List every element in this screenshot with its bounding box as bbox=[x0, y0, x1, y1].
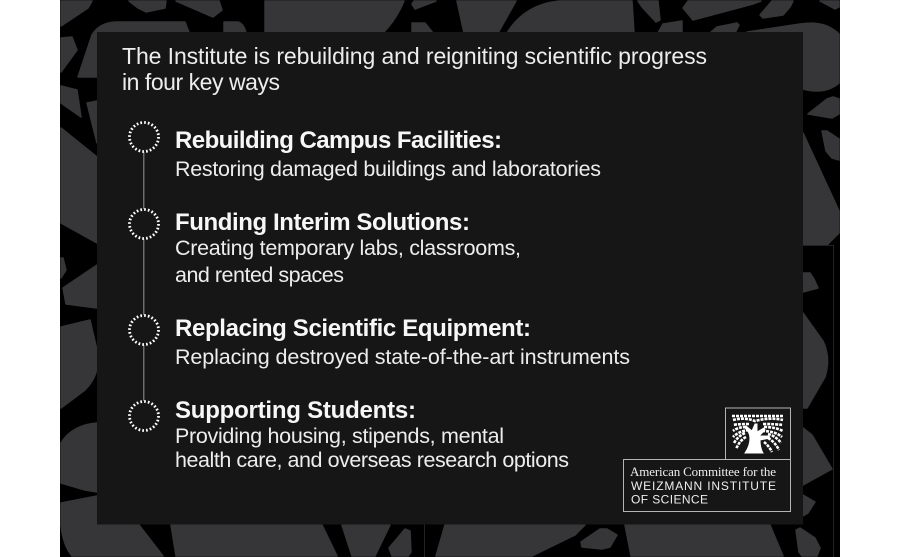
title: The Institute is rebuilding and reigniting scientific progress bbox=[122, 43, 707, 69]
icon: dotted ring 3 bbox=[130, 316, 158, 344]
heading: replacing scientific equipment: Replacing Scientific Equipment: bbox=[175, 315, 531, 342]
logo wordmark: American Committee for the bbox=[630, 464, 776, 479]
text: temporary labs: and rented spaces bbox=[175, 263, 344, 287]
icon: willow tree bbox=[732, 416, 783, 453]
text: replacing instruments: Replacing destroyed state-of-the-art instruments bbox=[175, 345, 630, 369]
main panel bbox=[97, 32, 803, 524]
text: housing and stipends bbox=[175, 424, 569, 472]
step 1: rebuilding campus facilities bbox=[130, 122, 601, 181]
text: housing and stipends: health care, and overseas research options bbox=[175, 448, 569, 472]
step 4: supporting students bbox=[130, 397, 569, 472]
logo wordmark: WEIZMANN INSTITUTE bbox=[631, 479, 776, 493]
icon: dotted ring 4 bbox=[130, 402, 158, 430]
logo wordmark bbox=[630, 464, 776, 506]
timeline connector bbox=[143, 152, 145, 401]
heading: funding interim solutions: Funding Interim Solutions: bbox=[175, 209, 470, 236]
text: housing and stipends: Providing housing, stipends, mental bbox=[175, 424, 504, 448]
step 2: funding interim solutions bbox=[130, 209, 521, 287]
icon: dotted ring 1 bbox=[130, 122, 158, 152]
text: restoring buildings: Restoring damaged buildings and laboratories bbox=[175, 157, 601, 181]
heading: supporting students: Supporting Students: bbox=[175, 397, 416, 424]
heading: rebuilding campus facilities: Rebuilding Campus Facilities: bbox=[175, 127, 502, 154]
logo: American Committee for the Weizmann Institute of Science bbox=[624, 408, 790, 512]
text: temporary labs bbox=[175, 236, 521, 287]
logo wordmark: OF SCIENCE bbox=[631, 492, 708, 506]
title: in four key ways bbox=[122, 69, 280, 95]
title bbox=[122, 43, 707, 95]
step 3: replacing scientific equipment bbox=[130, 315, 630, 369]
icon: dotted ring 2 bbox=[130, 210, 158, 238]
text: temporary labs: Creating temporary labs, classrooms, bbox=[175, 236, 521, 260]
